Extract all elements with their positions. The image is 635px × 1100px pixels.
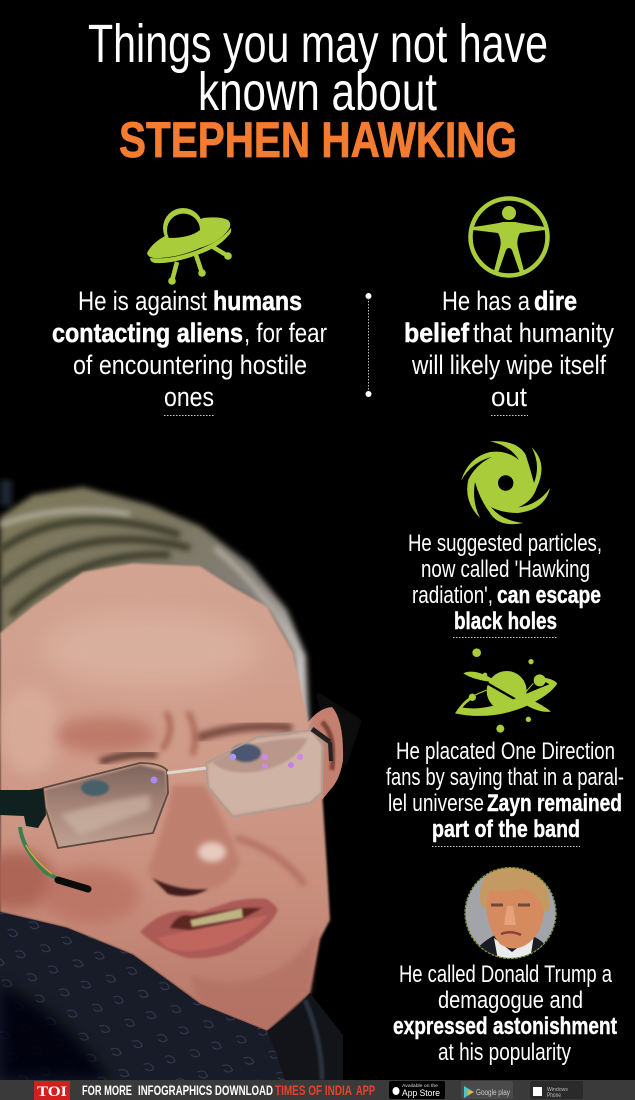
photo: Donald Trump <box>464 866 557 960</box>
Windows Phone badge: Windows <box>547 1087 568 1093</box>
text: Donald Trump: demagogue and <box>438 987 583 1014</box>
ear <box>306 707 343 800</box>
text: aliens: of encountering hostile <box>73 350 307 380</box>
right lens and eye <box>208 732 322 815</box>
icon: flying saucer <box>147 208 232 285</box>
footer message: TIMES OF INDIA <box>275 1082 352 1098</box>
icon: black hole swirl <box>461 441 550 524</box>
text: aliens <box>52 286 327 416</box>
text: dire belief: dire <box>534 286 577 316</box>
title: known about <box>198 62 437 122</box>
text: dire belief: He has a <box>442 286 531 316</box>
text: Hawking radiation: black holes <box>454 608 557 635</box>
hair <box>0 487 309 725</box>
Windows Phone badge <box>530 1081 583 1099</box>
jaw shading <box>190 930 318 1031</box>
text: One Direction <box>386 738 624 846</box>
title: STEPHEN HAWKING <box>119 112 517 168</box>
footer bar <box>0 1080 635 1100</box>
text: One Direction: part of the band <box>432 816 580 843</box>
text: aliens: He is against <box>78 286 207 316</box>
mouth <box>140 898 278 958</box>
text: dire belief: belief <box>404 318 470 348</box>
text: aliens: humans <box>213 286 302 316</box>
photo: Stephen Hawking portrait <box>0 480 362 1080</box>
Google play badge: Google play <box>476 1088 510 1097</box>
forehead shading <box>40 612 260 688</box>
App Store badge: App Store <box>402 1088 440 1099</box>
text: Hawking radiation <box>408 530 602 638</box>
text: Hawking radiation: can escape <box>497 582 601 609</box>
text: dire belief: that humanity <box>473 318 614 348</box>
icon: planet with orbits <box>455 648 557 733</box>
footer message: INFOGRAPHICS DOWNLOAD <box>138 1082 273 1098</box>
text: One Direction: lel universe <box>388 790 484 817</box>
Windows Phone badge: Phone <box>547 1093 562 1099</box>
text: aliens: , for fear <box>244 318 327 348</box>
TOI logo: TOI <box>37 1084 67 1100</box>
scarf <box>0 912 343 1080</box>
text: dire belief <box>404 286 614 416</box>
nose <box>148 785 305 896</box>
title <box>88 14 548 168</box>
text: aliens: ones <box>164 382 214 412</box>
text: Donald Trump: at his popularity <box>438 1039 572 1066</box>
text: aliens: contacting aliens <box>52 318 243 348</box>
icon: vitruvian figure <box>470 198 548 276</box>
text: Hawking radiation: radiation', <box>412 582 493 609</box>
footer message: APP <box>356 1082 375 1098</box>
App Store badge: Available on the <box>402 1083 439 1088</box>
TOI logo <box>34 1081 70 1100</box>
left lens and eye <box>45 765 167 847</box>
App Store badge <box>389 1081 445 1099</box>
footer message: FOR MORE <box>82 1082 132 1098</box>
left side and cheek shade <box>0 850 55 910</box>
earpiece and microphone <box>0 788 88 889</box>
center divider <box>366 293 372 397</box>
Google play badge <box>461 1081 513 1099</box>
text: dire belief: out <box>491 382 527 412</box>
text: Donald Trump <box>393 961 617 1066</box>
footer message <box>82 1082 375 1098</box>
brow furrows <box>55 717 155 753</box>
glasses <box>43 729 331 848</box>
face <box>0 563 330 1031</box>
